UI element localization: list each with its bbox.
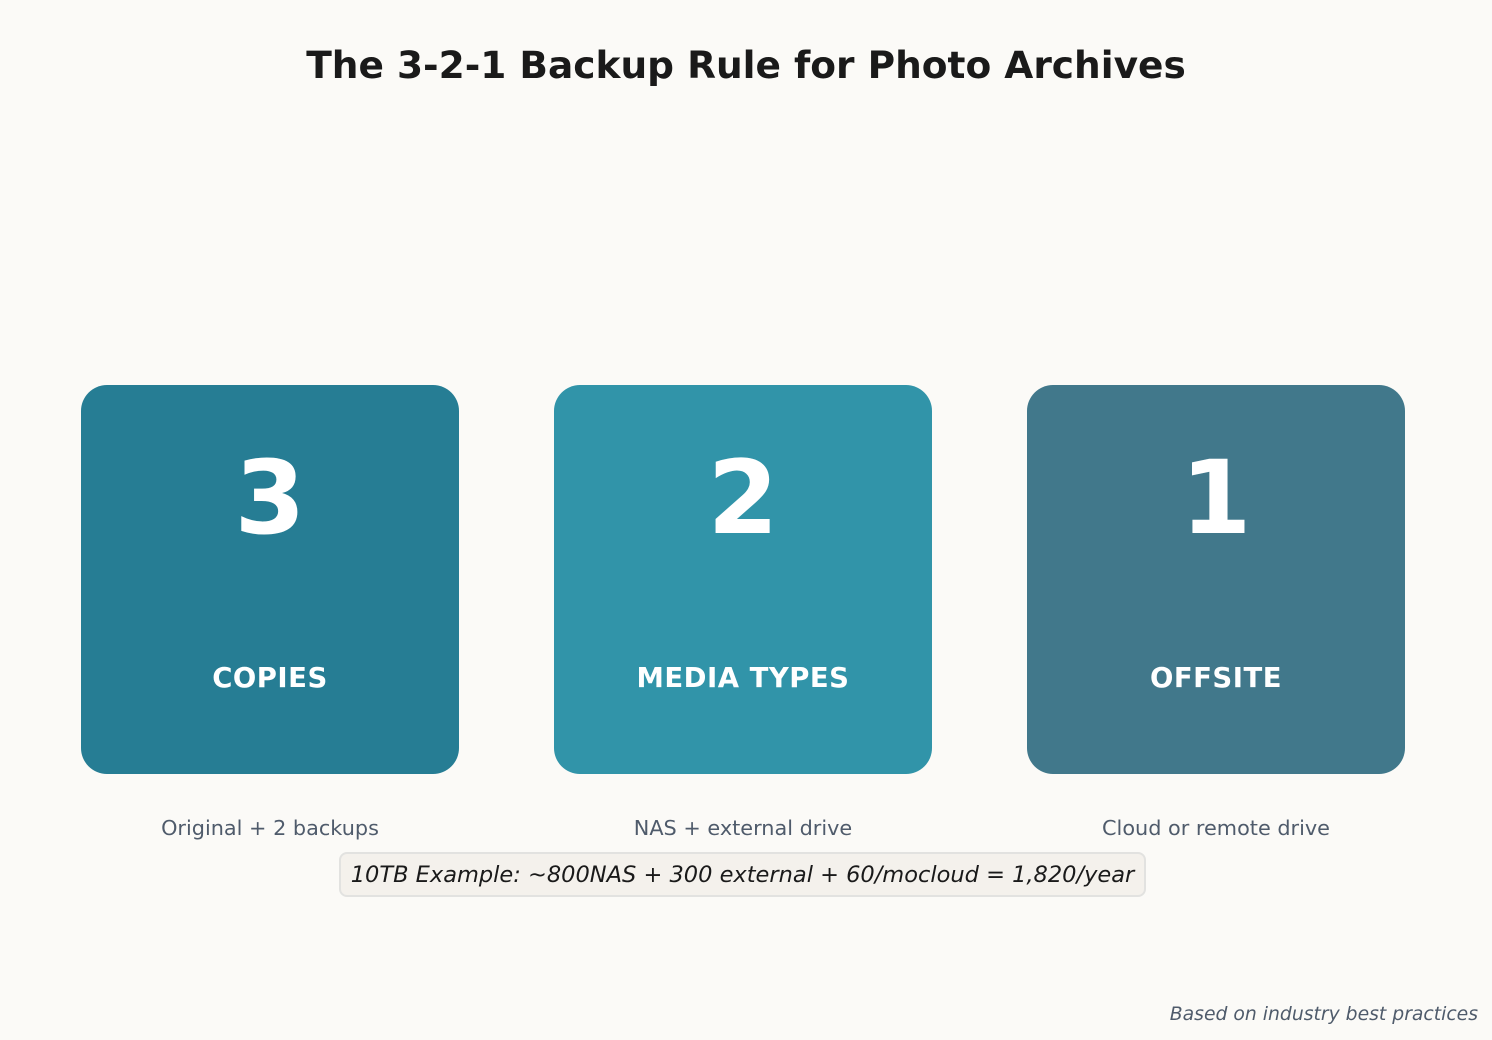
- panel: media types: MEDIA TYPES: [636, 662, 850, 694]
- panel: copies: COPIES: [212, 662, 328, 694]
- panel: copies: [81, 385, 459, 774]
- callout: cost example: 10TB Example: ~800NAS + 300 external + 60/mocloud = 1,820/year: [351, 862, 1134, 888]
- title: The 3-2-1 Backup Rule for Photo Archives: [306, 43, 1186, 87]
- panel: offsite: [1027, 385, 1405, 774]
- caption: media: NAS + external drive: [634, 816, 852, 840]
- panel: media types: [554, 385, 932, 774]
- panel: media types: 2: [708, 439, 778, 558]
- panel: offsite: 1: [1180, 439, 1251, 558]
- footnote: Based on industry best practices: [1170, 1004, 1478, 1025]
- caption: offsite: Cloud or remote drive: [1102, 816, 1330, 840]
- caption: copies: Original + 2 backups: [161, 816, 379, 840]
- panel: copies: 3: [234, 439, 305, 558]
- callout: cost example: [339, 852, 1146, 897]
- panel: offsite: OFFSITE: [1150, 662, 1282, 694]
